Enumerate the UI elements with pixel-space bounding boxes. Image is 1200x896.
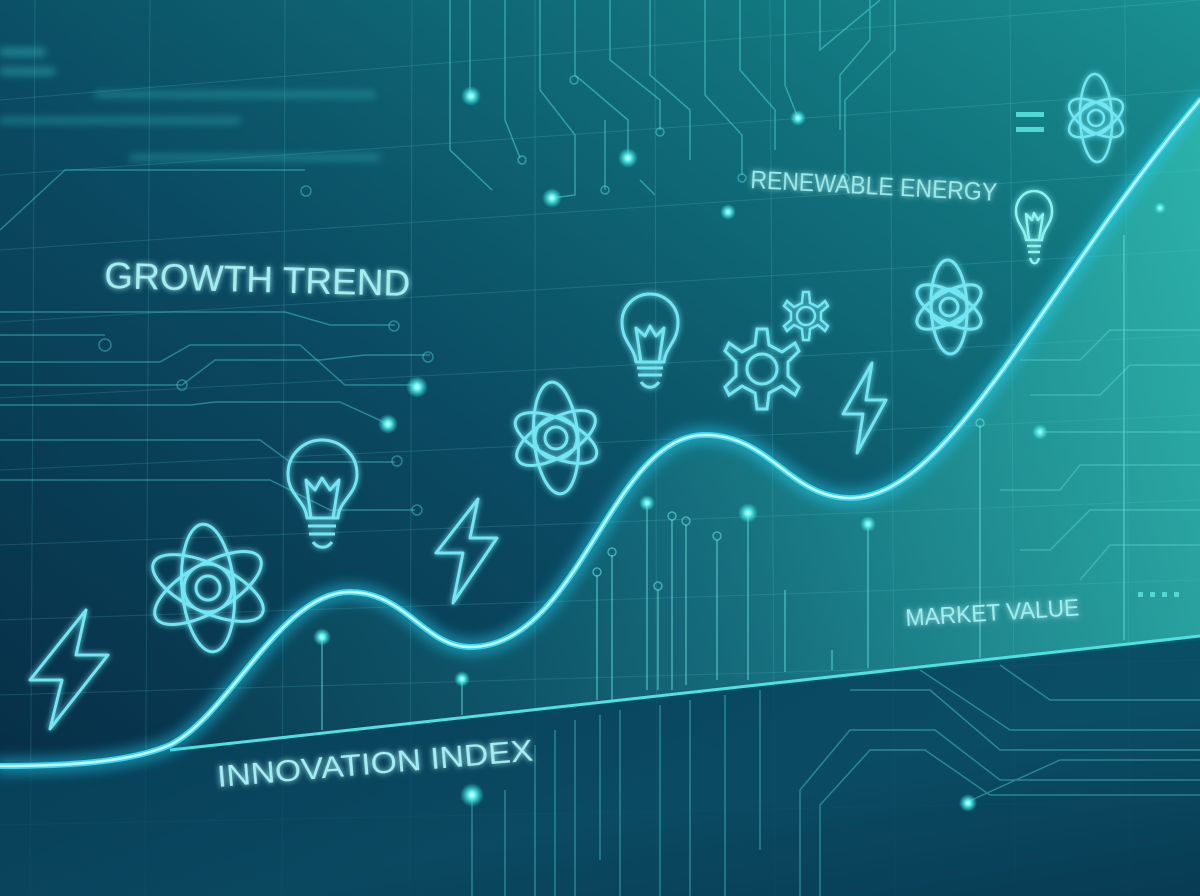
icon: atom 3 — [910, 259, 988, 355]
label: innovation index: INNOVATION INDEX — [216, 733, 535, 794]
glowing nodes — [313, 86, 1166, 812]
trend line — [0, 100, 1200, 766]
baseline axis — [170, 636, 1200, 750]
blurred data bars, top left — [0, 48, 380, 160]
icon: atom 2 — [508, 380, 604, 496]
label: market value: MARKET VALUE — [905, 594, 1080, 632]
icon: large gear — [725, 329, 799, 409]
area under curve — [0, 100, 1200, 770]
circuit traces, bottom — [472, 665, 1200, 896]
icon: lightning bolt 3 — [843, 363, 886, 453]
icon: atom 1 — [143, 522, 273, 654]
icon: small gear — [784, 292, 828, 340]
icon: atom 4 — [1063, 73, 1129, 163]
lower panel below baseline — [0, 636, 1200, 896]
icon: light bulb 1 — [288, 440, 357, 547]
heading: growth trend: GROWTH TREND — [104, 255, 411, 304]
icon: light bulb 2 — [622, 294, 678, 387]
circuit traces, right — [1000, 330, 1200, 580]
icon: lightning bolt 1 — [30, 610, 108, 729]
circuit traces, lower middle — [322, 235, 1124, 730]
circuit traces, left — [0, 170, 433, 515]
icon: lightning bolt 2 — [436, 499, 497, 603]
icon: light bulb 3 — [1016, 191, 1052, 263]
dash marks — [1016, 112, 1179, 597]
circuit traces, top — [450, 0, 895, 198]
heading: renewable energy: RENEWABLE ENERGY — [750, 166, 998, 207]
